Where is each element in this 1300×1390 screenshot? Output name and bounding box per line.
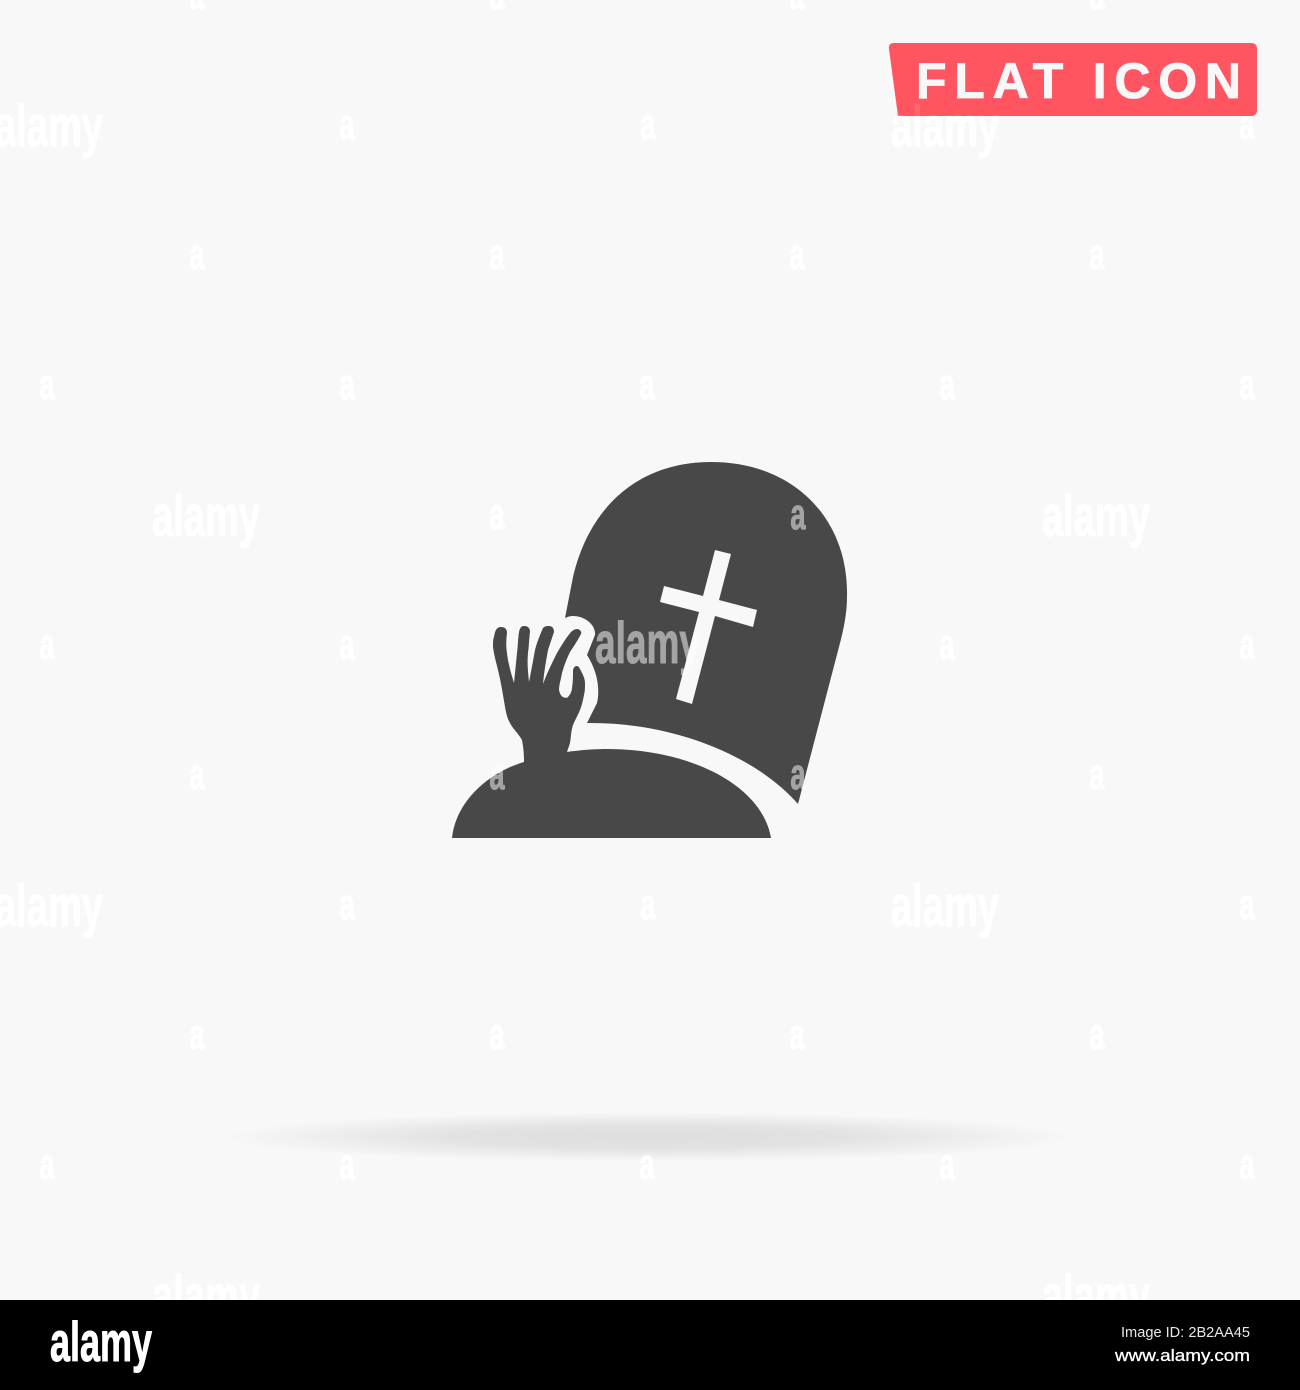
burial mound [452, 749, 771, 838]
watermark: small repeated letters: a [789, 1009, 805, 1059]
watermark: small repeated letters: a [789, 229, 805, 279]
watermark: small repeated letters: a [339, 619, 355, 669]
watermark: small repeated letters: a [1239, 359, 1255, 409]
watermark: small repeated letters: a [939, 1139, 955, 1189]
watermark: small repeated letters: a [339, 359, 355, 409]
watermark: small repeated letters: a [939, 359, 955, 409]
watermark: small repeated letters [39, 0, 1255, 1189]
watermark: small letters over icon: a [790, 749, 806, 799]
watermark: small repeated letters: a [39, 619, 55, 669]
watermark: alamy wordmarks: alamy [152, 1264, 260, 1329]
watermark: alamy wordmarks: alamy [152, 484, 260, 549]
watermark: small letters over icon: a [790, 489, 806, 539]
tombstone [565, 462, 847, 804]
watermark: small repeated letters: a [1089, 1009, 1105, 1059]
watermark: alamy wordmarks: alamy [1042, 484, 1150, 549]
watermark: small repeated letters: a [489, 229, 505, 279]
watermark: small repeated letters: a [489, 489, 505, 539]
watermark: small repeated letters: a [489, 1009, 505, 1059]
watermark: small repeated letters: a [189, 749, 205, 799]
website: www.alamy.com [1114, 1346, 1250, 1365]
badge: flat icon: FLAT ICON [916, 53, 1241, 109]
watermark: alamy wordmarks [0, 94, 1150, 1329]
image id: Image ID: 2B2AA45 [1121, 1324, 1250, 1341]
faint watermark over badge: alamy [891, 94, 999, 159]
watermark: small repeated letters: a [640, 99, 656, 149]
watermark: centre wordmark over icon: alamy [595, 611, 700, 676]
watermark: small repeated letters: a [639, 359, 655, 409]
watermark: small repeated letters: a [189, 229, 205, 279]
cross [660, 550, 757, 704]
watermark: small repeated letters: a [1239, 99, 1255, 149]
ground shadow [220, 1112, 1076, 1162]
watermark: small repeated letters: a [339, 1139, 355, 1189]
zombie hand [493, 626, 585, 770]
watermark: small letters over icon: a [489, 749, 505, 799]
watermark: small repeated letters: a [1239, 619, 1255, 669]
watermark: small repeated letters: a [39, 1139, 55, 1189]
watermark: small letters over icon [489, 489, 806, 799]
badge: flat icon [888, 43, 1257, 116]
watermark: small repeated letters: a [1239, 1139, 1255, 1189]
watermark: alamy wordmarks: alamy [1042, 1264, 1150, 1329]
watermark: small repeated letters: a [189, 1009, 205, 1059]
watermark: small repeated letters: a [39, 359, 55, 409]
watermark: small repeated letters: a [939, 619, 955, 669]
watermark: small repeated letters: a [339, 99, 355, 149]
watermark: small repeated letters: a [1239, 879, 1255, 929]
watermark: small repeated letters: a [339, 879, 355, 929]
watermark: alamy wordmarks: alamy [891, 94, 999, 159]
watermark: small repeated letters: a [1089, 229, 1105, 279]
icon: grave with tombstone, cross and hand [452, 462, 847, 838]
watermark: small repeated letters: a [640, 879, 656, 929]
footer logo: alamy [50, 1310, 152, 1373]
watermark: small repeated letters: a [1089, 749, 1105, 799]
watermark: alamy wordmarks: alamy [891, 874, 999, 939]
watermark: small repeated letters: a [639, 1139, 655, 1189]
footer bar [0, 1300, 1300, 1390]
